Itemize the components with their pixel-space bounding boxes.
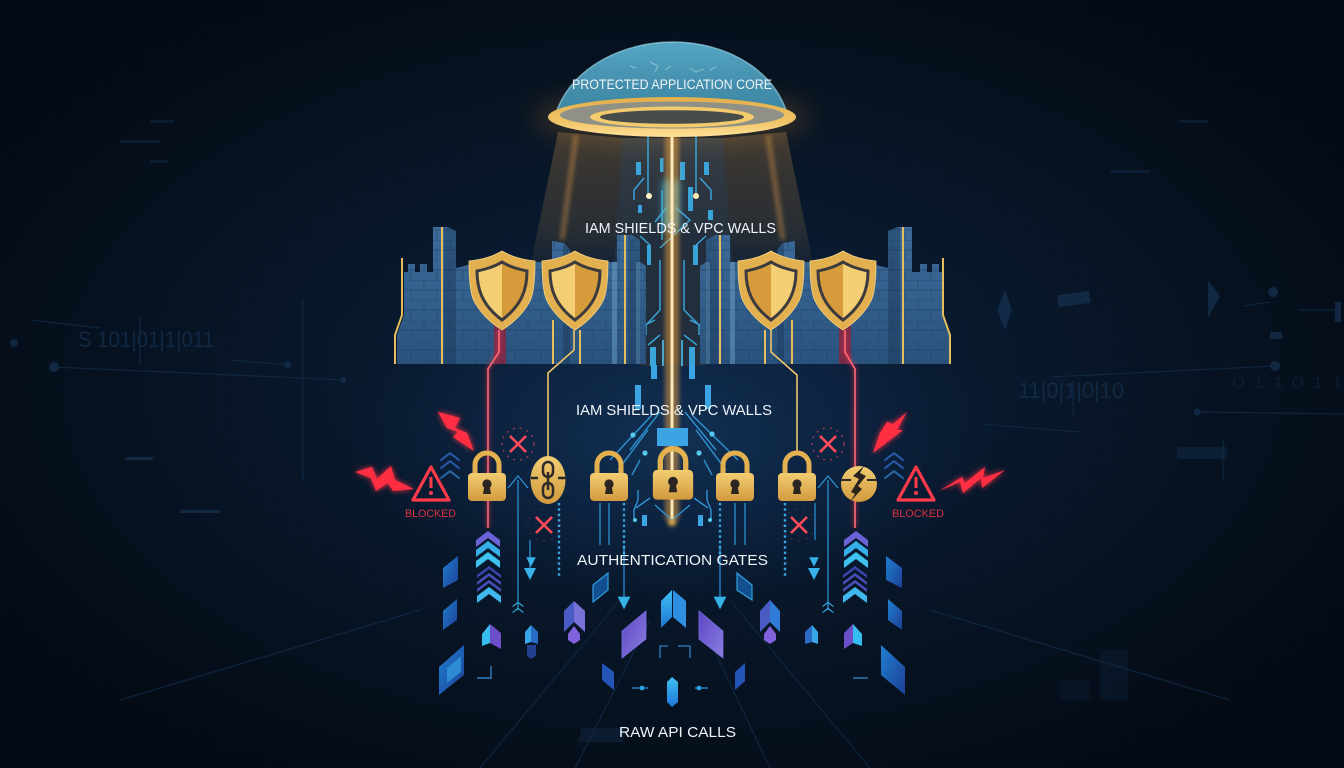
arrowheads (513, 557, 833, 613)
raw API call shards: right (699, 556, 905, 695)
glow halo around core ring (532, 96, 812, 140)
chevron stack left (440, 452, 501, 603)
warning right: blocked (892, 467, 944, 520)
blocked X marks (502, 428, 844, 541)
label: iam shields upper: IAM SHIELDS & VPC WALLS (585, 220, 776, 237)
padlock 3 (590, 453, 628, 501)
red breach glow under shields (494, 325, 851, 364)
shield 4 (810, 251, 876, 330)
background data motifs: 11|0|1|0|10 (1018, 378, 1124, 403)
light beams from core (530, 132, 814, 268)
gold core connection line (665, 135, 679, 520)
padlock row (468, 449, 877, 504)
label: iam shields lower: IAM SHIELDS & VPC WALLS (576, 402, 772, 419)
red and gold connection lines (488, 330, 855, 528)
gate area glow backdrop (342, 270, 1002, 610)
shield 3 (738, 251, 804, 330)
shield 1 (469, 251, 535, 330)
padlock 1 (468, 453, 506, 501)
lightning bolts (355, 412, 1005, 493)
shield 2 (542, 251, 608, 330)
raw API call shards: centre (632, 590, 708, 707)
padlock 6 (778, 453, 816, 501)
lower circuit fan (610, 365, 738, 526)
core ring (548, 97, 796, 137)
background data motifs: S 101|01|1|011 (78, 327, 214, 352)
label: raw api calls: RAW API CALLS (619, 724, 736, 741)
circuit spine above walls (634, 130, 713, 366)
raw API call shards: left (439, 556, 646, 695)
vertical arrows and dotted feeds (508, 476, 838, 610)
label: protected application core: PROTECTED APPLICATION CORE (572, 77, 772, 92)
label: authentication gates: AUTHENTICATION GATES (577, 552, 768, 569)
chevron stack right (843, 452, 904, 603)
castle wall: left (397, 227, 646, 364)
broken gate (841, 466, 877, 502)
warning left: blocked (405, 467, 456, 520)
castle wall: right (700, 227, 950, 364)
padlock 5 (716, 453, 754, 501)
dome: protected core (557, 42, 786, 110)
chain gate (530, 456, 566, 504)
background data motifs: 0 1 1 0 1 1 (1232, 375, 1344, 392)
centre padlock (653, 449, 693, 500)
warning left: blocked: BLOCKED (405, 508, 456, 520)
warning right: blocked: BLOCKED (892, 508, 944, 520)
gold wall trims (395, 227, 950, 364)
